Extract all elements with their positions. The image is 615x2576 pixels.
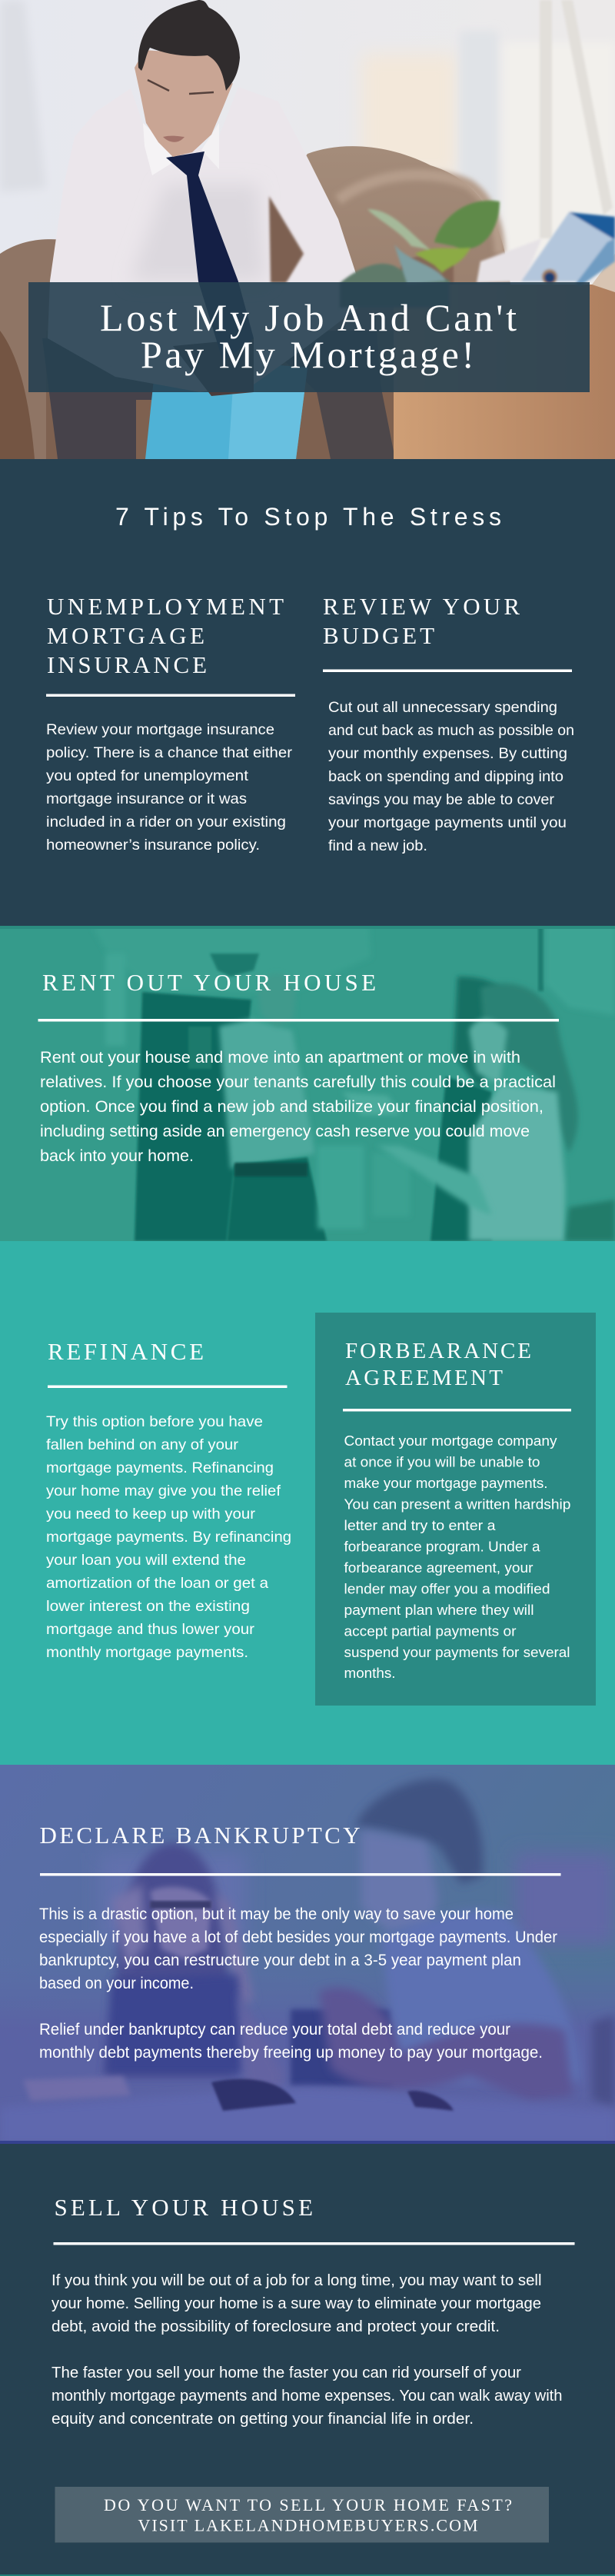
text block: You can present a written hardship bbox=[344, 1496, 570, 1512]
text block bbox=[344, 1433, 570, 1681]
panel: rent out your house bbox=[0, 926, 615, 1241]
text block: months. bbox=[344, 1665, 395, 1681]
heading: REFINANCE bbox=[48, 1338, 204, 1365]
text block: suspend your payments for several bbox=[344, 1644, 570, 1660]
teal section background bbox=[0, 1241, 615, 1765]
panel: review your budget bbox=[323, 593, 574, 854]
text block bbox=[52, 2271, 563, 2428]
text block: back into your home. bbox=[40, 1147, 194, 1165]
heading: DECLARE BANKRUPTCY bbox=[40, 1822, 360, 1849]
text block: savings you may be able to cover bbox=[328, 791, 555, 808]
heading bbox=[47, 593, 284, 678]
hero photo: worried man on a sofa with a box of belongings bbox=[0, 0, 615, 461]
text block: forbearance program. Under a bbox=[344, 1538, 540, 1555]
text block: you opted for unemployment bbox=[46, 767, 249, 784]
title: Lost My Job And Can't bbox=[100, 296, 517, 339]
text block: mortgage and thus lower your bbox=[46, 1621, 255, 1638]
text block: your home may give you the relief bbox=[46, 1483, 281, 1499]
text block bbox=[40, 1048, 556, 1165]
heading: UNEMPLOYMENT bbox=[47, 593, 284, 620]
text block: mortgage payments. By refinancing bbox=[46, 1529, 291, 1546]
text block: included in a rider on your existing bbox=[46, 814, 286, 830]
text block: including setting aside an emergency cash reserve you could move bbox=[40, 1122, 530, 1140]
heading: MORTGAGE bbox=[47, 622, 204, 649]
text block: equity and concentrate on getting your financial life in order. bbox=[52, 2410, 474, 2428]
text block: Rent out your house and move into an apartment or move in with bbox=[40, 1048, 520, 1067]
heading: REVIEW YOUR bbox=[323, 593, 520, 620]
photo: handing over keys at a front door bbox=[0, 926, 615, 1241]
text block: Review your mortgage insurance bbox=[46, 721, 274, 738]
text block: your mortgage payments until you bbox=[328, 814, 567, 831]
icon: tie bbox=[166, 151, 254, 361]
panel: refinance bbox=[46, 1338, 291, 1661]
text block bbox=[39, 1905, 557, 2062]
heading: INSURANCE bbox=[47, 651, 207, 678]
text block: back on spending and dipping into bbox=[328, 768, 563, 785]
text block bbox=[46, 1413, 291, 1661]
text block: relatives. If you choose your tenants carefully this could be a practical bbox=[40, 1073, 556, 1091]
text block: Contact your mortgage company bbox=[344, 1433, 557, 1449]
text block: make your mortgage payments. bbox=[344, 1475, 547, 1491]
heading: FORBEARANCE bbox=[345, 1339, 531, 1363]
text block: policy. There is a chance that either bbox=[46, 744, 293, 761]
photo: stressed couple with bills at a table bbox=[0, 1765, 615, 2144]
icon: sofa bbox=[0, 146, 513, 461]
text block: Cut out all unnecessary spending bbox=[328, 699, 557, 716]
heading: SELL YOUR HOUSE bbox=[54, 2194, 313, 2221]
text block: accept partial payments or bbox=[344, 1622, 517, 1639]
heading bbox=[345, 1339, 531, 1390]
text block: mortgage insurance or it was bbox=[46, 790, 247, 807]
callout: call to action: VISIT LAKELANDHOMEBUYERS.COM bbox=[138, 2516, 478, 2534]
text block: mortgage payments. Refinancing bbox=[46, 1459, 274, 1476]
title bbox=[101, 305, 517, 375]
heading: BUDGET bbox=[323, 622, 434, 649]
text block: lender may offer you a modified bbox=[344, 1581, 550, 1596]
text block: payment plan where they will bbox=[344, 1602, 534, 1618]
text block: letter and try to enter a bbox=[344, 1517, 496, 1533]
callout: call to action: DO YOU WANT TO SELL YOUR HOME FAST? bbox=[104, 2495, 512, 2514]
icon: binder and papers bbox=[477, 212, 615, 286]
text block: forbearance agreement, your bbox=[344, 1559, 534, 1576]
text block: your home. Selling your home is a sure way to eliminate your mortgage bbox=[52, 2295, 541, 2312]
text block: bankruptcy, you can restructure your debt in a 3-5 year payment plan bbox=[39, 1951, 521, 1969]
text block: based on your income. bbox=[39, 1974, 194, 1992]
text block: Relief under bankruptcy can reduce your total debt and reduce your bbox=[39, 2020, 510, 2039]
text block: option. Once you find a new job and stabilize your financial position, bbox=[40, 1097, 544, 1116]
text block: debt, avoid the possibility of foreclosure and protect your credit. bbox=[52, 2318, 500, 2335]
text block: especially if you have a lot of debt besides your mortgage payments. Under bbox=[39, 1928, 557, 1946]
text block: monthly mortgage payments and home expenses. You can walk away with bbox=[52, 2387, 563, 2405]
panel: sell your house bbox=[52, 2194, 575, 2428]
icon: trousers bbox=[49, 392, 394, 459]
text block: amortization of the loan or get a bbox=[46, 1575, 268, 1592]
title banner bbox=[28, 282, 590, 392]
icon: shirt and torso bbox=[48, 123, 357, 396]
text block: and cut back as much as possible on bbox=[328, 722, 574, 739]
text block: lower interest on the existing bbox=[46, 1598, 250, 1615]
text block: you need to keep up with your bbox=[46, 1506, 256, 1523]
heading bbox=[323, 593, 520, 649]
callout: call to action bbox=[55, 2487, 549, 2542]
text block: Try this option before you have bbox=[46, 1413, 263, 1430]
panel: forbearance agreement bbox=[315, 1313, 596, 1706]
text block: The faster you sell your home the faster you can rid yourself of your bbox=[52, 2364, 521, 2381]
text block: This is a drastic option, but it may be the only way to save your home bbox=[39, 1905, 514, 1923]
text block: find a new job. bbox=[328, 837, 427, 854]
text block: monthly debt payments thereby freeing up money to pay your mortgage. bbox=[39, 2043, 543, 2062]
icon: blue gift bag bbox=[145, 358, 308, 459]
heading: RENT OUT YOUR HOUSE bbox=[42, 969, 376, 996]
text block bbox=[46, 721, 293, 854]
text block: monthly mortgage payments. bbox=[46, 1644, 248, 1661]
title: Pay My Mortgage! bbox=[141, 333, 474, 376]
text block: If you think you will be out of a job for a long time, you may want to sell bbox=[52, 2271, 541, 2289]
text block: your loan you will extend the bbox=[46, 1552, 246, 1569]
text block: your monthly expenses. By cutting bbox=[328, 745, 567, 762]
text block: fallen behind on any of your bbox=[46, 1436, 239, 1453]
panel: declare bankruptcy bbox=[0, 1765, 615, 2144]
icon: man's face and hair bbox=[135, 0, 240, 157]
panel: unemployment mortgage insurance bbox=[46, 593, 295, 854]
heading: AGREEMENT bbox=[345, 1366, 503, 1390]
text block bbox=[328, 699, 574, 854]
text block: at once if you will be unable to bbox=[344, 1453, 540, 1470]
subtitle: 7 Tips To Stop The Stress bbox=[115, 503, 501, 531]
text block: homeowner’s insurance policy. bbox=[46, 837, 260, 854]
icon: plant bbox=[340, 201, 500, 308]
icon: cardboard box bbox=[394, 285, 615, 459]
